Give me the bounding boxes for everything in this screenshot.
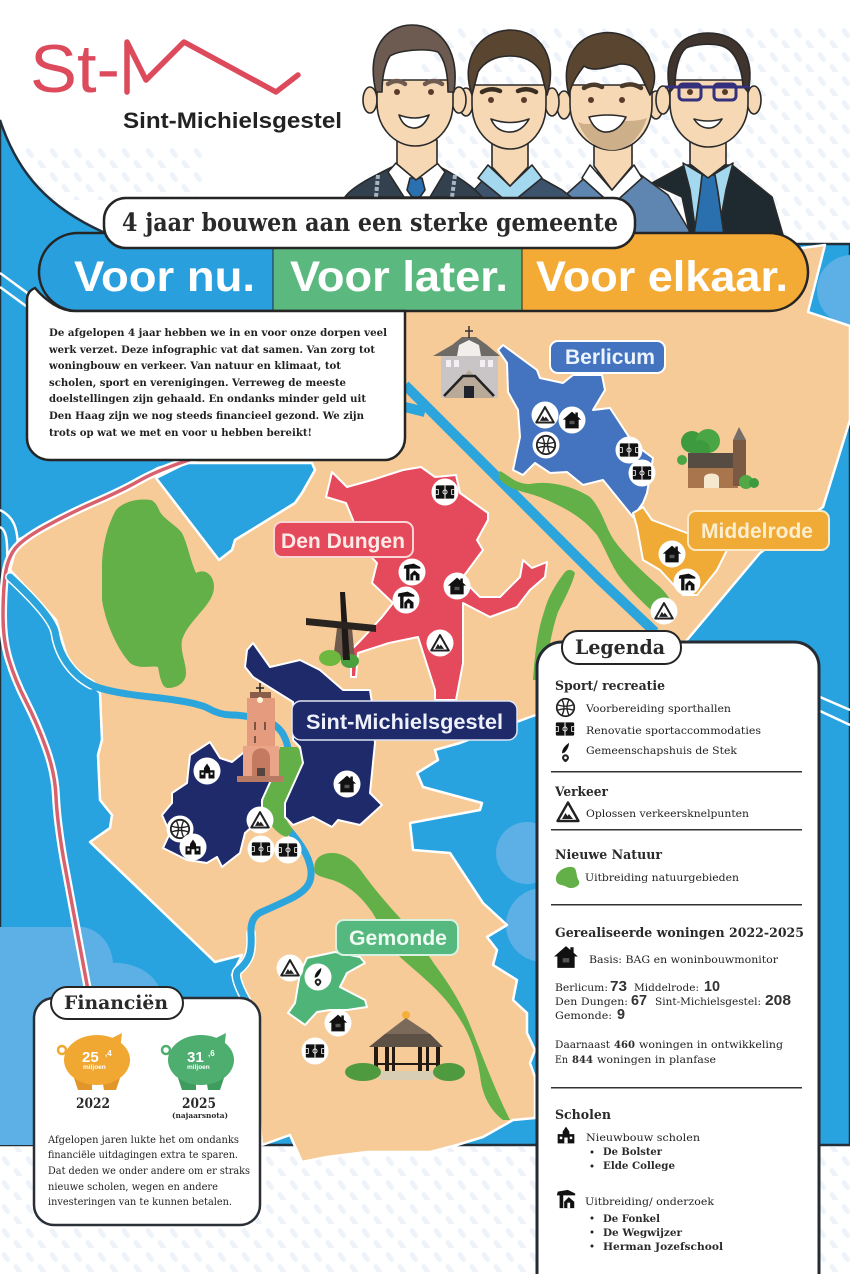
legend section: housing: En: [555, 1054, 568, 1066]
decorative white lines: [0, 273, 850, 725]
portrait 2: [459, 30, 575, 235]
legend title pill: Legenda: [575, 635, 665, 659]
map icons: Den Dungen: [392, 478, 470, 656]
legend section: sport: Sport/ recreatie: [555, 679, 665, 694]
logo: [30, 31, 342, 133]
intro text panel: Den Haag zijn we nog steeds financieel gezond. We zijn: [49, 410, 364, 422]
legend section: housing: Sint-Michielsgestel:: [655, 996, 761, 1008]
legend section: housing: Middelrode:: [634, 982, 699, 994]
landmark: gazebo Gemonde: [345, 1011, 465, 1081]
landmark: town hall Berlicum: [433, 326, 500, 398]
panel: finances: [34, 987, 260, 1225]
legend section: sport: Voorbereiding sporthallen: [585, 703, 731, 715]
legend section: sport: Gemeenschapshuis de Stek: [586, 745, 738, 757]
landmark: windmill Den Dungen: [306, 592, 376, 668]
legend section: housing: Daarnaast: [555, 1039, 611, 1051]
intro text panel: trots op wat we met en voor u hebben bereikt!: [49, 427, 312, 439]
panel: finances: (najaarsnota): [172, 1111, 228, 1120]
district label: Gemonde: [336, 920, 458, 955]
finances text: [47, 1135, 250, 1208]
legend section: schools: De Fonkel: [603, 1214, 660, 1225]
piggy bank 2022: 25: [82, 1049, 99, 1066]
finances text: Afgelopen jaren lukte het om ondanks: [47, 1135, 239, 1146]
finances text: Dat deden we onder andere om er straks: [48, 1166, 250, 1177]
legend section: schools: De Wegwijzer: [603, 1228, 683, 1239]
finances title pill: [51, 987, 183, 1019]
water: pond: [156, 463, 315, 560]
district label: Sint-Michielsgestel: [292, 701, 517, 740]
nature areas: [102, 471, 672, 1120]
legend section: traffic: Oplossen verkeersknelpunten: [586, 808, 749, 820]
district: Middelrode: [633, 507, 727, 595]
district label: Sint-Michielsgestel: Sint-Michielsgestel: [306, 711, 503, 734]
legend section: housing: Den Dungen:: [555, 996, 628, 1008]
piggy bank 2022: ,4: [105, 1049, 112, 1058]
legend section: nature: [555, 848, 739, 888]
logo: Sint-Michielsgestel: [123, 108, 342, 133]
map icons: Berlicum: [532, 402, 656, 486]
intro text panel: werk verzet. Deze infographic vat dat samen. Van zorg tot: [48, 344, 375, 356]
map: land: [10, 245, 850, 1162]
legend section: sport: Renovatie sportaccommodaties: [586, 725, 761, 737]
legend section: housing: [554, 926, 804, 1066]
district label: Middelrode: Middelrode: [701, 520, 813, 543]
district: Gemonde: [288, 952, 367, 1025]
title pill: 4 jaar bouwen aan een sterke gemeente: [122, 208, 618, 237]
legend section: housing: woningen in planfase: [597, 1054, 716, 1066]
legend section: schools: Nieuwbouw scholen: [586, 1132, 700, 1144]
district: Berlicum: [498, 345, 653, 517]
legend section: housing: Berlicum:: [555, 982, 608, 994]
legend section: housing: Gerealiseerde woningen 2022-2025: [555, 926, 804, 941]
portrait 4: [652, 33, 783, 235]
intro text panel: De afgelopen 4 jaar hebben we in en voor onze dorpen veel: [49, 327, 387, 339]
landmark: church tower Sint-Michielsgestel: [237, 683, 283, 782]
title pill: [104, 198, 635, 248]
district: Den Dungen: [326, 467, 547, 700]
light clouds: [0, 255, 850, 1145]
intro text panel: [27, 288, 405, 460]
intro text panel: doelstellingen zijn gehaald. En ondanks minder geld uit: [49, 393, 366, 405]
district label: Den Dungen: [274, 522, 413, 557]
finances text: nieuwe scholen, wegen en andere: [48, 1182, 218, 1193]
intro text panel: woningbouw en verkeer. Van natuur en klimaat, tot: [48, 360, 341, 372]
map icons: Gemonde: [276, 954, 352, 1064]
banner: Voor nu, Voor later, Voor elkaar: Voor elkaar.: [536, 253, 788, 301]
district label: Berlicum: [550, 341, 665, 373]
portrait 1: [345, 25, 482, 197]
district: Sint-Michielsgestel: [162, 643, 382, 867]
district label: Gemonde: Gemonde: [349, 927, 447, 950]
legend title pill: [562, 631, 681, 664]
intro text panel: scholen, sport en verenigingen. Verreweg de meeste: [49, 377, 346, 389]
legend section: housing: 10: [704, 978, 720, 995]
piggy bank 2025: 31: [187, 1049, 204, 1066]
legend section: housing: 844: [572, 1054, 593, 1066]
legend section: housing: Gemonde:: [555, 1010, 612, 1022]
legend section: housing: Basis: BAG en woninbouwmonitor: [589, 954, 779, 966]
finances text: investeringen van te kunnen betalen.: [48, 1197, 232, 1208]
piggy bank 2022: [58, 1033, 130, 1090]
legend section: schools: Scholen: [555, 1108, 612, 1123]
piggy bank 2025: [162, 1033, 234, 1090]
legend section: housing: 73: [610, 978, 627, 995]
legend section: schools: Herman Jozefschool: [603, 1242, 723, 1253]
legend section: housing: 460: [614, 1039, 635, 1051]
railway line: [3, 458, 195, 990]
finances text: financiële uitdagingen extra te sparen.: [48, 1150, 238, 1161]
legend section: schools: Uitbreiding/ onderzoek: [585, 1196, 715, 1208]
legend section: housing: woningen in ontwikkeling: [639, 1039, 783, 1051]
legend section: housing: 208: [765, 992, 791, 1009]
panel: finances: 2022: [76, 1096, 110, 1112]
banner: Voor nu, Voor later, Voor elkaar: Voor nu.: [74, 253, 255, 301]
legend section: traffic: Verkeer: [554, 785, 608, 800]
piggy bank 2022: miljoen: [83, 1064, 106, 1071]
panel: legend: [537, 631, 819, 1274]
banner: Voor nu, Voor later, Voor elkaar: [39, 233, 808, 311]
piggy bank 2025: miljoen: [187, 1064, 210, 1071]
legend section: traffic: [554, 785, 749, 821]
river: canal: [405, 385, 655, 632]
legend section: schools: De Bolster: [603, 1147, 663, 1158]
banner: Voor nu, Voor later, Voor elkaar: Voor later.: [290, 253, 508, 301]
legend section: schools: Elde College: [603, 1161, 675, 1172]
portraits of the four council members: [345, 25, 783, 235]
panel: finances: 2025: [182, 1096, 216, 1112]
district label: Middelrode: [688, 511, 829, 550]
legend section: nature: Uitbreiding natuurgebieden: [585, 872, 739, 884]
legend section: sport: [555, 679, 761, 762]
legend section: nature: Nieuwe Natuur: [555, 848, 662, 863]
legend section: housing: 67: [631, 992, 647, 1009]
legend section: schools: [555, 1108, 723, 1253]
piggy bank 2025: ,6: [208, 1049, 215, 1058]
finances title pill: Financiën: [64, 992, 168, 1014]
map icons: Middelrode: [650, 540, 700, 624]
district label: Den Dungen: Den Dungen: [281, 530, 405, 553]
district label: Berlicum: Berlicum: [565, 346, 655, 369]
river: west and centre: [10, 577, 311, 1000]
legend section: housing: 9: [617, 1006, 625, 1023]
logo: St-: [30, 31, 120, 107]
map icons: Sint-Michielsgestel: [166, 758, 360, 864]
portrait 3: [557, 33, 692, 235]
landmark: castle and tower Middelrode: [677, 427, 759, 489]
